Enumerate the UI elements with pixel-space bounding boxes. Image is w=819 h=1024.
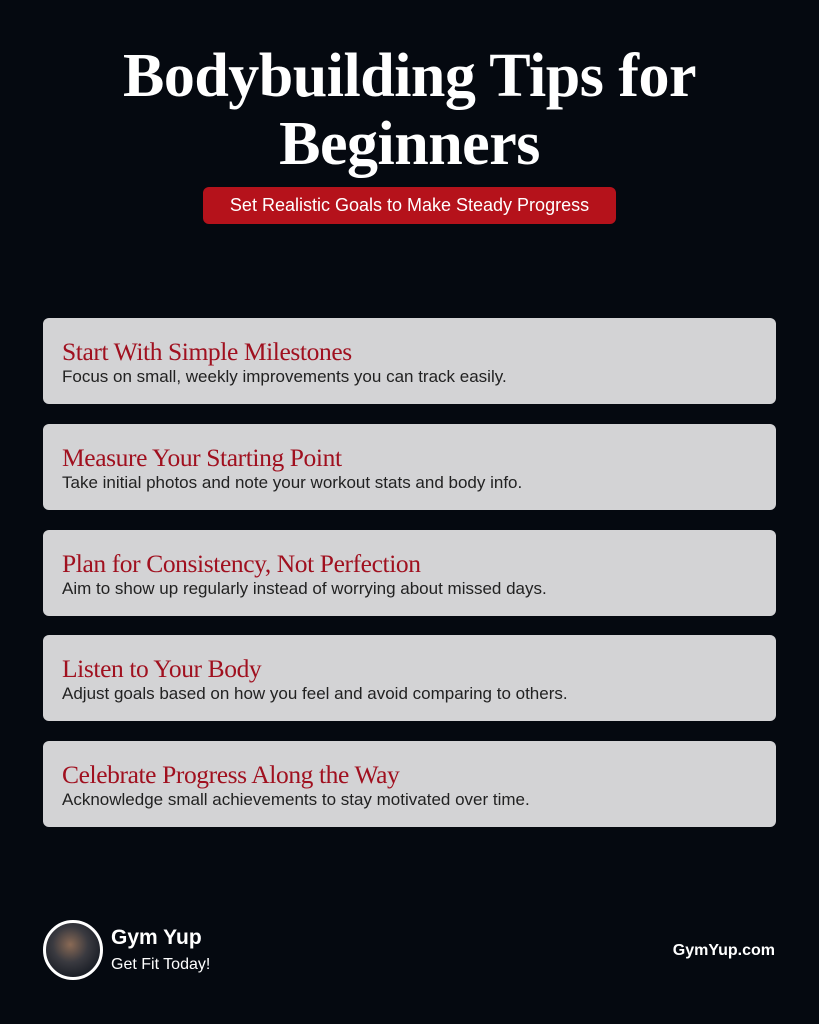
card: consistency: Aim to show up regularly instead of worrying about missed days. bbox=[62, 579, 547, 598]
card: celebrate: Acknowledge small achievements to stay motivated over time. bbox=[62, 790, 530, 809]
brand text: Get Fit Today! bbox=[111, 956, 210, 973]
subtitle pill bbox=[203, 187, 616, 224]
brand text bbox=[111, 926, 210, 973]
card: listen: Listen to Your Body bbox=[62, 654, 261, 683]
website: GymYup.com bbox=[673, 942, 775, 959]
title: Beginners bbox=[279, 110, 540, 178]
card: celebrate: Celebrate Progress Along the Way bbox=[62, 760, 399, 789]
title bbox=[123, 42, 696, 178]
card: milestones: Focus on small, weekly improvements you can track easily. bbox=[62, 367, 507, 386]
icon: avatar bbox=[43, 920, 103, 980]
card: starting point bbox=[43, 424, 776, 510]
card: listen: Adjust goals based on how you feel and avoid comparing to others. bbox=[62, 684, 568, 703]
brand text: Gym Yup bbox=[111, 926, 202, 949]
card: starting point: Take initial photos and note your workout stats and body info. bbox=[62, 473, 522, 492]
card: consistency: Plan for Consistency, Not Perfection bbox=[62, 549, 421, 578]
card: listen bbox=[43, 635, 776, 721]
card: celebrate bbox=[43, 741, 776, 827]
card: consistency bbox=[43, 530, 776, 616]
card: starting point: Measure Your Starting Point bbox=[62, 443, 342, 472]
subtitle pill: Set Realistic Goals to Make Steady Progress bbox=[230, 195, 589, 215]
card: milestones bbox=[43, 318, 776, 404]
card: milestones: Start With Simple Milestones bbox=[62, 337, 352, 366]
title: Bodybuilding Tips for bbox=[123, 42, 696, 110]
